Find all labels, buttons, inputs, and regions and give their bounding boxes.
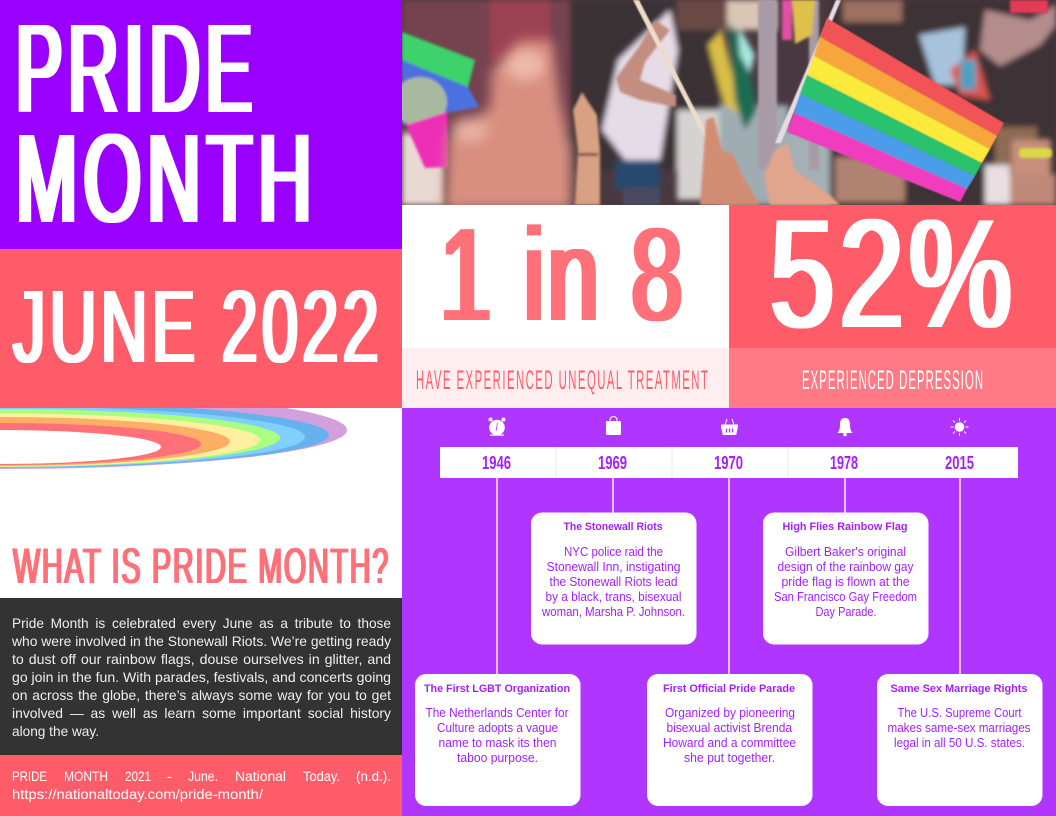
stat: 1 in 8: HAVE EXPERIENCED UNEQUAL TREATMENT <box>416 366 708 396</box>
timeline year bar <box>440 447 1018 478</box>
panel: citation: PRIDE <box>12 768 47 784</box>
card: Same Sex Marriage Rights: Same Sex Marriage Rights <box>890 683 1028 695</box>
title <box>16 0 318 249</box>
date: JUNE 2022 <box>13 269 383 384</box>
blurred foreground hand <box>444 40 572 210</box>
timeline year bar: 1946 <box>482 453 511 473</box>
panel: citation: MONTH <box>64 768 108 784</box>
timeline year bar: 1978 <box>830 453 858 473</box>
panel: citation: Today. <box>303 768 340 784</box>
card: The First LGBT Organization <box>415 674 580 806</box>
card: Same Sex Marriage Rights: makes same-sex marriages <box>888 721 1030 735</box>
card: The Stonewall Riots: The Stonewall Riots <box>564 521 662 533</box>
icon: basket <box>721 419 738 435</box>
wooden pole <box>633 0 708 137</box>
left flag <box>393 32 479 168</box>
large flag pole <box>775 0 841 143</box>
truss <box>758 0 1052 170</box>
card: The First LGBT Organization: The First LGBT Organization <box>424 683 570 695</box>
icon: alarm clock <box>488 418 506 436</box>
panel: citation: National <box>235 768 286 784</box>
panel: description: along the way. <box>12 723 99 739</box>
card: The First LGBT Organization: The Netherlands Center for <box>426 706 568 720</box>
card: The First LGBT Organization: taboo purpose. <box>457 751 538 765</box>
rainbow arc <box>0 408 347 469</box>
panel: description: who were involved in the Stonewall Riots. We’re getting ready <box>11 633 391 649</box>
title panel <box>0 0 402 249</box>
stat: 52%: EXPERIENCED DEPRESSION <box>802 366 983 396</box>
card: The Stonewall Riots: NYC police raid the <box>564 545 663 559</box>
panel: citation: (n.d.). <box>356 768 391 784</box>
panel: description <box>0 598 402 755</box>
timeline year bar: 1969 <box>598 453 627 473</box>
icon: shopping bag <box>606 417 621 435</box>
panel: description: on across the globe, there’s always some way for you to get <box>12 687 391 703</box>
panel: citation: 2021 <box>125 768 151 784</box>
panel: description: to dust off our rainbow flags, douse ourselves in glitter, and <box>12 651 391 667</box>
card: High Flies Rainbow Flag: San Francisco Gay Freedom <box>774 590 917 604</box>
card: The Stonewall Riots: the Stonewall Riots lead <box>550 575 678 589</box>
card: First Official Pride Parade: First Official Pride Parade <box>663 683 795 695</box>
woman's arm <box>616 20 676 107</box>
title: MONTH <box>16 108 318 249</box>
date panel <box>0 249 402 408</box>
stat: 1 in 8 <box>402 201 729 408</box>
card: High Flies Rainbow Flag <box>763 512 928 644</box>
panel: citation: - <box>167 768 172 784</box>
card: First Official Pride Parade: Organized by pioneering <box>665 706 795 720</box>
icon: sun <box>950 418 968 436</box>
title: PRIDE <box>16 0 258 139</box>
card: High Flies Rainbow Flag: High Flies Rainbow Flag <box>782 521 908 533</box>
card: High Flies Rainbow Flag: pride flag is flown at the <box>782 575 910 589</box>
timeline year bar: 1970 <box>714 453 743 473</box>
card: The First LGBT Organization: name to mask its then <box>438 736 557 750</box>
card: The Stonewall Riots: by a black, trans, bisexual <box>546 590 682 604</box>
card: The First LGBT Organization: Culture adopts a vague <box>437 721 558 735</box>
icon: bell <box>838 418 852 436</box>
card: High Flies Rainbow Flag: design of the rainbow gay <box>778 560 914 574</box>
card: First Official Pride Parade: Howard and a committee <box>663 736 796 750</box>
card: The Stonewall Riots <box>531 512 696 644</box>
panel: description: go join in the fun. With parades, festivals, and concerts going <box>12 669 391 685</box>
panel: citation: https://nationaltoday.com/pride-month/ <box>12 786 263 802</box>
card: High Flies Rainbow Flag: Day Parade. <box>816 605 876 619</box>
stat: 52% <box>729 187 1056 408</box>
panel: timeline <box>402 408 1056 816</box>
card: The Stonewall Riots: woman, Marsha P. Johnson. <box>541 605 685 619</box>
hands <box>573 92 840 205</box>
panel: description: involved — as well as learn some important social history <box>12 705 391 721</box>
card: Same Sex Marriage Rights: The U.S. Supreme Court <box>898 706 1022 720</box>
heading: what is pride month: WHAT IS PRIDE MONTH? <box>13 538 390 594</box>
card: Same Sex Marriage Rights <box>877 674 1042 806</box>
card: Same Sex Marriage Rights: legal in all 50 U.S. states. <box>894 736 1025 750</box>
card: The Stonewall Riots: Stonewall Inn, instigating <box>546 560 681 574</box>
card: First Official Pride Parade: she put together. <box>684 751 775 765</box>
stat: 1 in 8: 1 in 8 <box>440 201 686 348</box>
card: First Official Pride Parade: bisexual activist Brenda <box>666 721 792 735</box>
panel: citation <box>0 755 402 816</box>
large rainbow flag <box>787 18 1004 202</box>
panel: description: Pride Month is celebrated every June as a tribute to those <box>12 615 391 631</box>
card: High Flies Rainbow Flag: Gilbert Baker's original <box>785 545 906 559</box>
card: First Official Pride Parade <box>647 674 812 806</box>
photo: crowd waving rainbow flags <box>393 0 1056 210</box>
timeline year bar: 2015 <box>945 453 974 473</box>
panel: citation: June. <box>188 768 218 784</box>
